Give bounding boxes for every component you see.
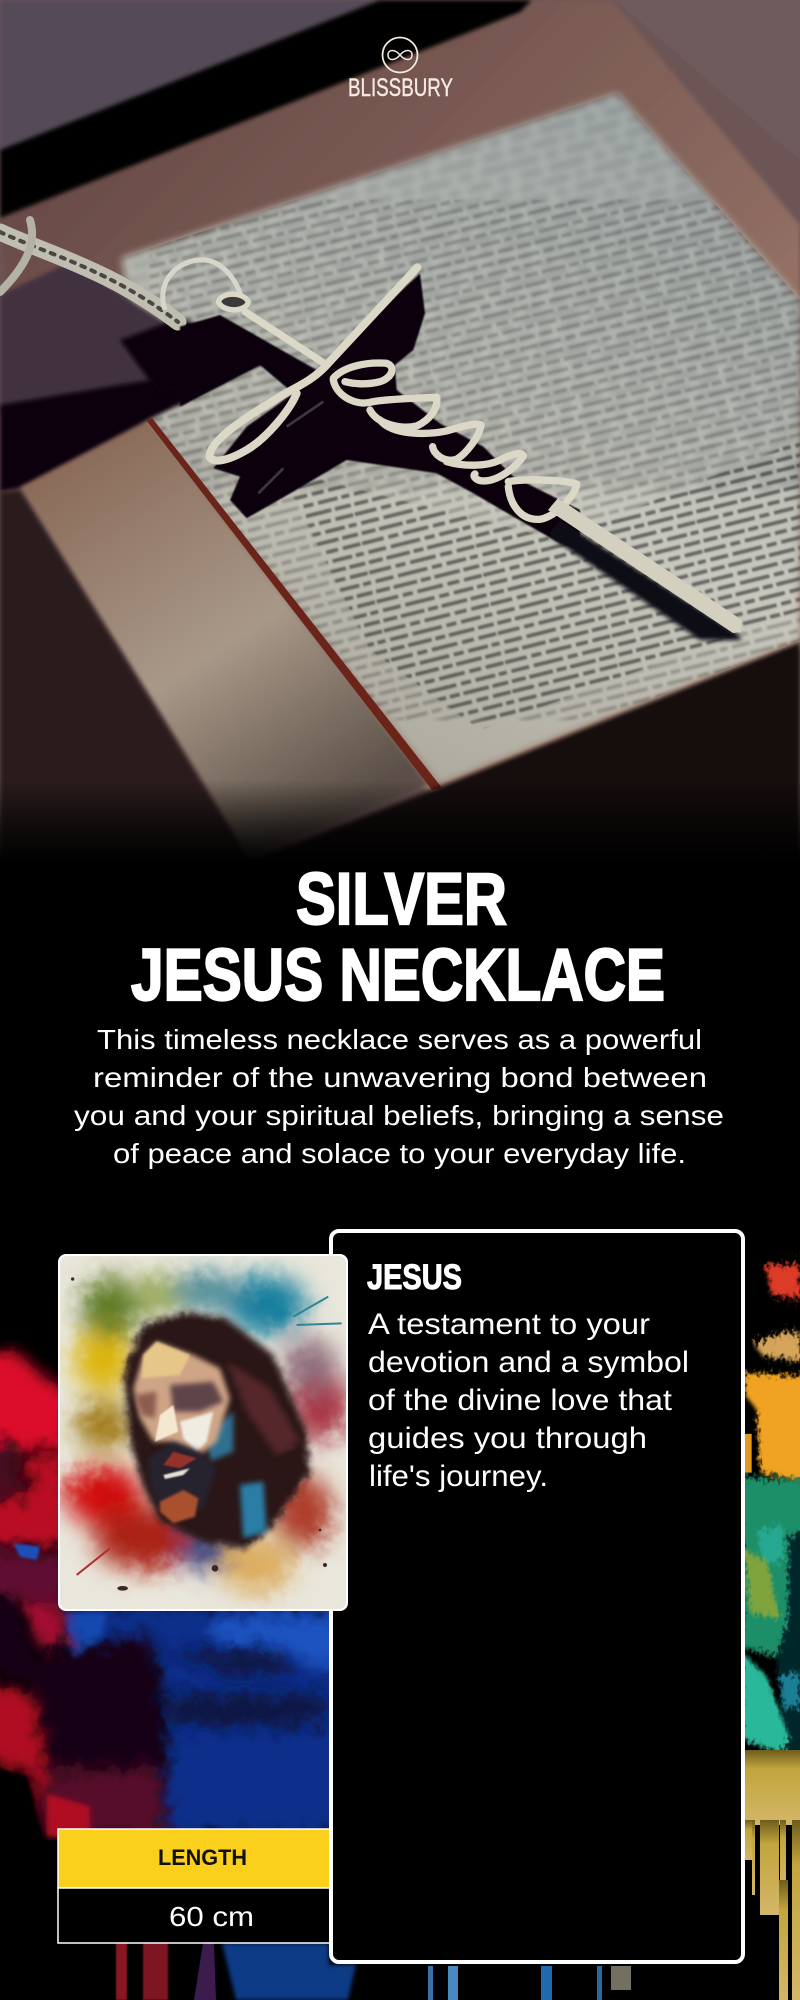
card frame [58,1254,348,1611]
teal blob [780,1671,800,1710]
pendant shadow [180,273,580,550]
panel box [331,1231,743,1962]
title line 2: JESUS NECKLACE [131,935,665,1016]
lower stem [548,498,742,633]
yellow drips [745,1750,800,2000]
print full page [150,200,800,720]
book outer edge [0,0,800,800]
arm [209,267,417,461]
blue mass [63,1603,347,1837]
card paper [60,1256,346,1609]
title [131,859,665,1016]
bottom red [47,1793,90,1837]
left margin page [20,422,428,855]
left orange [745,1434,752,1473]
lower right dark edge [255,642,800,860]
red page edge [146,418,442,790]
dark band [0,1443,37,1500]
watercolor portrait [63,1272,350,1593]
dark patch [777,1531,800,1763]
tan fragment [753,1332,800,1361]
open page [122,93,800,784]
table surface [0,0,800,860]
bright blue left [63,1613,107,1660]
bottom maroon [43,1767,167,1837]
intro paragraph [74,1024,724,1169]
splash streak [293,1297,342,1325]
logo [348,38,453,102]
lower left table [0,490,250,860]
dark streak in blue [160,1650,327,1727]
panel body: devotion and a symbol [368,1346,689,1379]
chain [0,220,178,322]
length table [58,1829,330,1943]
upper left book cover [0,0,385,155]
forehead light [142,1342,190,1378]
print blurred upper [120,90,800,490]
blue cheek shadow [207,1412,233,1462]
cross ribbons [209,267,577,519]
logo ring [382,38,418,72]
thin drips [428,1966,433,2000]
page print texture [120,90,800,730]
top right blurred wall [615,0,800,160]
red splash [0,1350,70,1450]
left purple book block [0,262,270,415]
cross eyelet [218,294,248,310]
blue robe streak [240,1482,267,1538]
eye shade [170,1382,223,1412]
hero photo: necklace on open book [0,0,800,862]
panel: jesus description [331,1231,743,1962]
crimson mass [0,1450,70,1547]
length label: LENGTH [158,1845,247,1870]
right paint splash [742,1264,800,2000]
watercolor washes [63,1272,350,1593]
green splash [742,1478,800,1657]
teal lower [742,1652,790,1754]
pendant [180,267,580,550]
blue fleck [13,1543,40,1560]
blue drip [222,1943,356,2000]
jump ring [163,260,242,310]
black band of upper book [0,0,532,218]
left red [0,1680,50,1837]
teal patch [757,1526,783,1565]
hair highlight [227,1362,300,1455]
logo infinity [388,50,412,60]
curls [333,363,392,384]
upper stem [245,312,322,362]
bottom fade [0,780,800,862]
nose light [155,1405,178,1442]
brand name: BLISSBURY [348,74,453,102]
hair and beard mass [123,1312,310,1548]
title line 1: SILVER [296,859,507,940]
beard [148,1442,217,1518]
lower stem shadow [548,520,742,640]
purple drip [194,1943,216,2000]
crimson flare [20,1600,70,1660]
panel heading: JESUS [367,1258,462,1297]
left paint splash [0,1350,347,1840]
panel body [368,1308,689,1493]
length value cell [58,1888,330,1943]
panel body: guides you through [368,1422,647,1455]
chain shadow [119,316,197,384]
print crisp lower [280,440,800,730]
shadow reflection [258,402,323,493]
yellow green patch [745,1550,780,1618]
portrait card [58,1254,350,1611]
lower black corner [0,1763,43,1840]
intro paragraph: you and your spiritual beliefs, bringing a sense [74,1100,724,1131]
left black block [0,360,270,492]
panel body: of the divine love that [368,1384,673,1417]
lip [163,1452,197,1468]
cheek light [180,1412,213,1452]
bright blue [213,1617,347,1673]
paint splatter [71,1277,327,1591]
intro paragraph: of peace and solace to your everyday life. [113,1138,686,1169]
dark center [0,1600,167,1770]
orange splash [745,1373,800,1482]
length value: 60 cm [169,1901,254,1932]
panel body: A testament to your [368,1308,650,1341]
red drips [116,1943,127,2000]
intro paragraph: This timeless necklace serves as a powerful [97,1024,702,1055]
red splash [765,1264,800,1298]
panel body: life's journey. [369,1460,548,1493]
face [133,1342,230,1455]
purple crimson [0,1547,70,1610]
length header [58,1829,330,1888]
bottom paint drips [116,1943,631,2000]
intro paragraph: reminder of the unwavering bond between [93,1062,707,1093]
beard tip [160,1490,198,1523]
